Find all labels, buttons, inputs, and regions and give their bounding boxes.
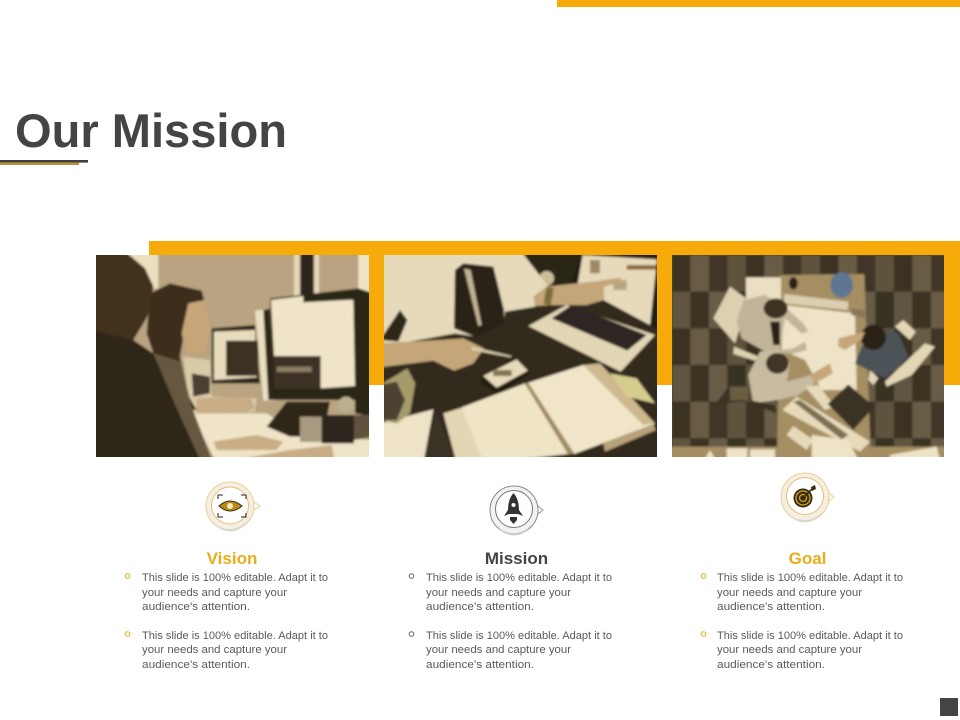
- bullet: vision first: [125, 574, 130, 578]
- corner square: [940, 698, 958, 716]
- bullet: goal first: [701, 574, 706, 578]
- text: vision first: This slide is 100% editable. Adapt it to: [142, 572, 328, 584]
- heading: mission: Mission: [485, 549, 548, 568]
- text: mission second: This slide is 100% editable. Adapt it to: [426, 630, 612, 642]
- column: vision: [125, 482, 328, 671]
- text: mission first: audience's attention.: [426, 601, 534, 613]
- bullet: goal second: [701, 632, 706, 636]
- text: vision second: This slide is 100% editable. Adapt it to: [142, 630, 328, 642]
- column: goal: [701, 473, 903, 671]
- heading: goal: Goal: [789, 549, 826, 568]
- title: Our Mission: [15, 104, 287, 157]
- icon: eye in circular frame: [206, 482, 260, 531]
- orange backing band: [149, 241, 960, 385]
- icon: target with dart in circular frame: [781, 473, 834, 522]
- photo: team meeting seen from above: [672, 255, 944, 457]
- text: vision second: audience's attention.: [142, 659, 250, 671]
- text: mission second: your needs and capture your: [426, 644, 571, 656]
- top accent bar: [557, 0, 960, 7]
- icon: rocket in circular frame: [490, 486, 543, 535]
- text: goal first: your needs and capture your: [717, 587, 862, 599]
- text: vision first: your needs and capture your: [142, 587, 287, 599]
- heading: vision: Vision: [207, 549, 257, 568]
- photo: laptop and notebook on a desk: [380, 250, 663, 463]
- column: mission: [409, 486, 612, 671]
- text: vision first: audience's attention.: [142, 601, 250, 613]
- text: vision second: your needs and capture your: [142, 644, 287, 656]
- text: goal first: audience's attention.: [717, 601, 825, 613]
- text: mission first: your needs and capture your: [426, 587, 571, 599]
- bullet: mission first: [409, 574, 414, 578]
- bullet: mission second: [409, 632, 414, 636]
- text: goal second: This slide is 100% editable. Adapt it to: [717, 630, 903, 642]
- text: goal second: your needs and capture your: [717, 644, 862, 656]
- text: goal second: audience's attention.: [717, 659, 825, 671]
- bullet: vision second: [125, 632, 130, 636]
- text: goal first: This slide is 100% editable. Adapt it to: [717, 572, 903, 584]
- text: mission first: This slide is 100% editable. Adapt it to: [426, 572, 612, 584]
- text: mission second: audience's attention.: [426, 659, 534, 671]
- title underline: [0, 160, 88, 165]
- photo: colleagues at computers: [90, 250, 373, 463]
